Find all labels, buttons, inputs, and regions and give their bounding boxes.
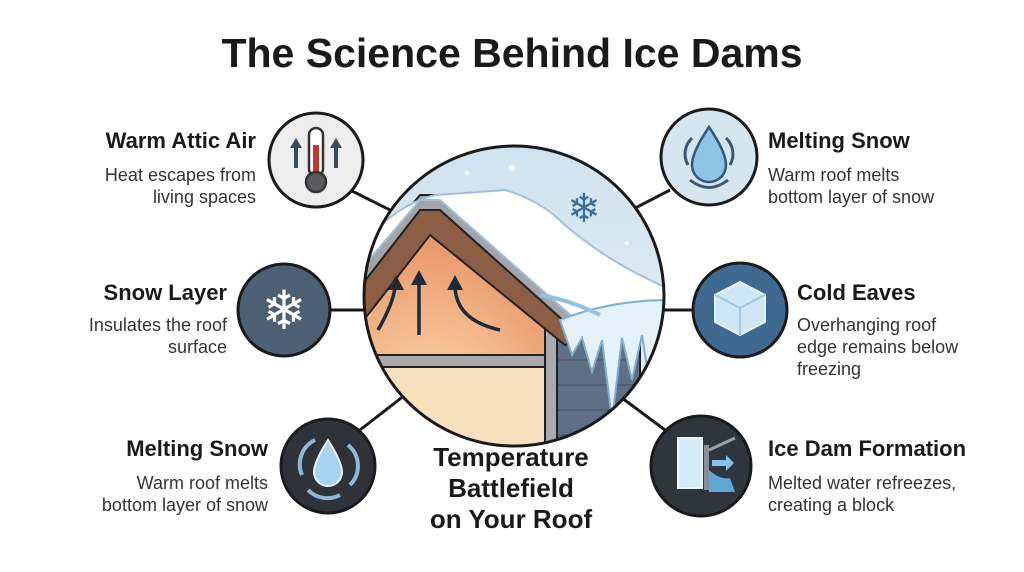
text: ice dam formation: creating a block [768, 495, 894, 515]
text: warm attic air [105, 128, 256, 207]
text: cold eaves: freezing [797, 359, 861, 379]
text: warm attic air: living spaces [153, 187, 256, 207]
text: snow layer: Insulates the roof [89, 315, 227, 335]
text: ice dam formation: Ice Dam Formation [768, 436, 966, 461]
center caption: Temperature [433, 442, 589, 472]
text: ice dam formation [768, 436, 966, 515]
title: The Science Behind Ice Dams [221, 30, 803, 76]
diagram [236, 108, 788, 518]
text: warm attic air: Warm Attic Air [106, 128, 256, 153]
snow mass [370, 189, 662, 316]
icon: snowflake: ❄ [261, 279, 307, 342]
text: melting snow left: bottom layer of snow [102, 495, 268, 515]
connector lines [330, 190, 692, 430]
text: melting snow left: Melting Snow [126, 436, 268, 461]
text: ice dam formation: Melted water refreezes, [768, 473, 956, 493]
text: cold eaves: Cold Eaves [797, 280, 916, 305]
central illustration: roof [362, 144, 666, 448]
center caption: on Your Roof [430, 504, 592, 534]
text: melting snow right: Warm roof melts [768, 165, 899, 185]
text: melting snow left [102, 436, 268, 515]
icon: ice cube [693, 263, 787, 357]
text: cold eaves [797, 280, 958, 379]
text: cold eaves: edge remains below [797, 337, 958, 357]
text: melting snow right: Melting Snow [768, 128, 910, 153]
text: cold eaves: Overhanging roof [797, 315, 936, 335]
text: snow layer [89, 280, 228, 357]
center caption: Battlefield [448, 473, 574, 503]
icon: snowflake [238, 264, 330, 356]
center caption [430, 442, 592, 534]
icon: melting snow right [661, 109, 757, 205]
text: melting snow right [768, 128, 934, 207]
text: melting snow left: Warm roof melts [137, 473, 268, 493]
text: snow layer: Snow Layer [104, 280, 227, 305]
text: melting snow right: bottom layer of snow [768, 187, 934, 207]
icon: ice dam formation [651, 416, 751, 516]
text: warm attic air: Heat escapes from [105, 165, 256, 185]
icon: thermometer [269, 113, 363, 207]
central illustration: roof: ❄ [567, 186, 601, 232]
icon: melting snow left [281, 419, 375, 513]
text: snow layer: surface [168, 337, 227, 357]
